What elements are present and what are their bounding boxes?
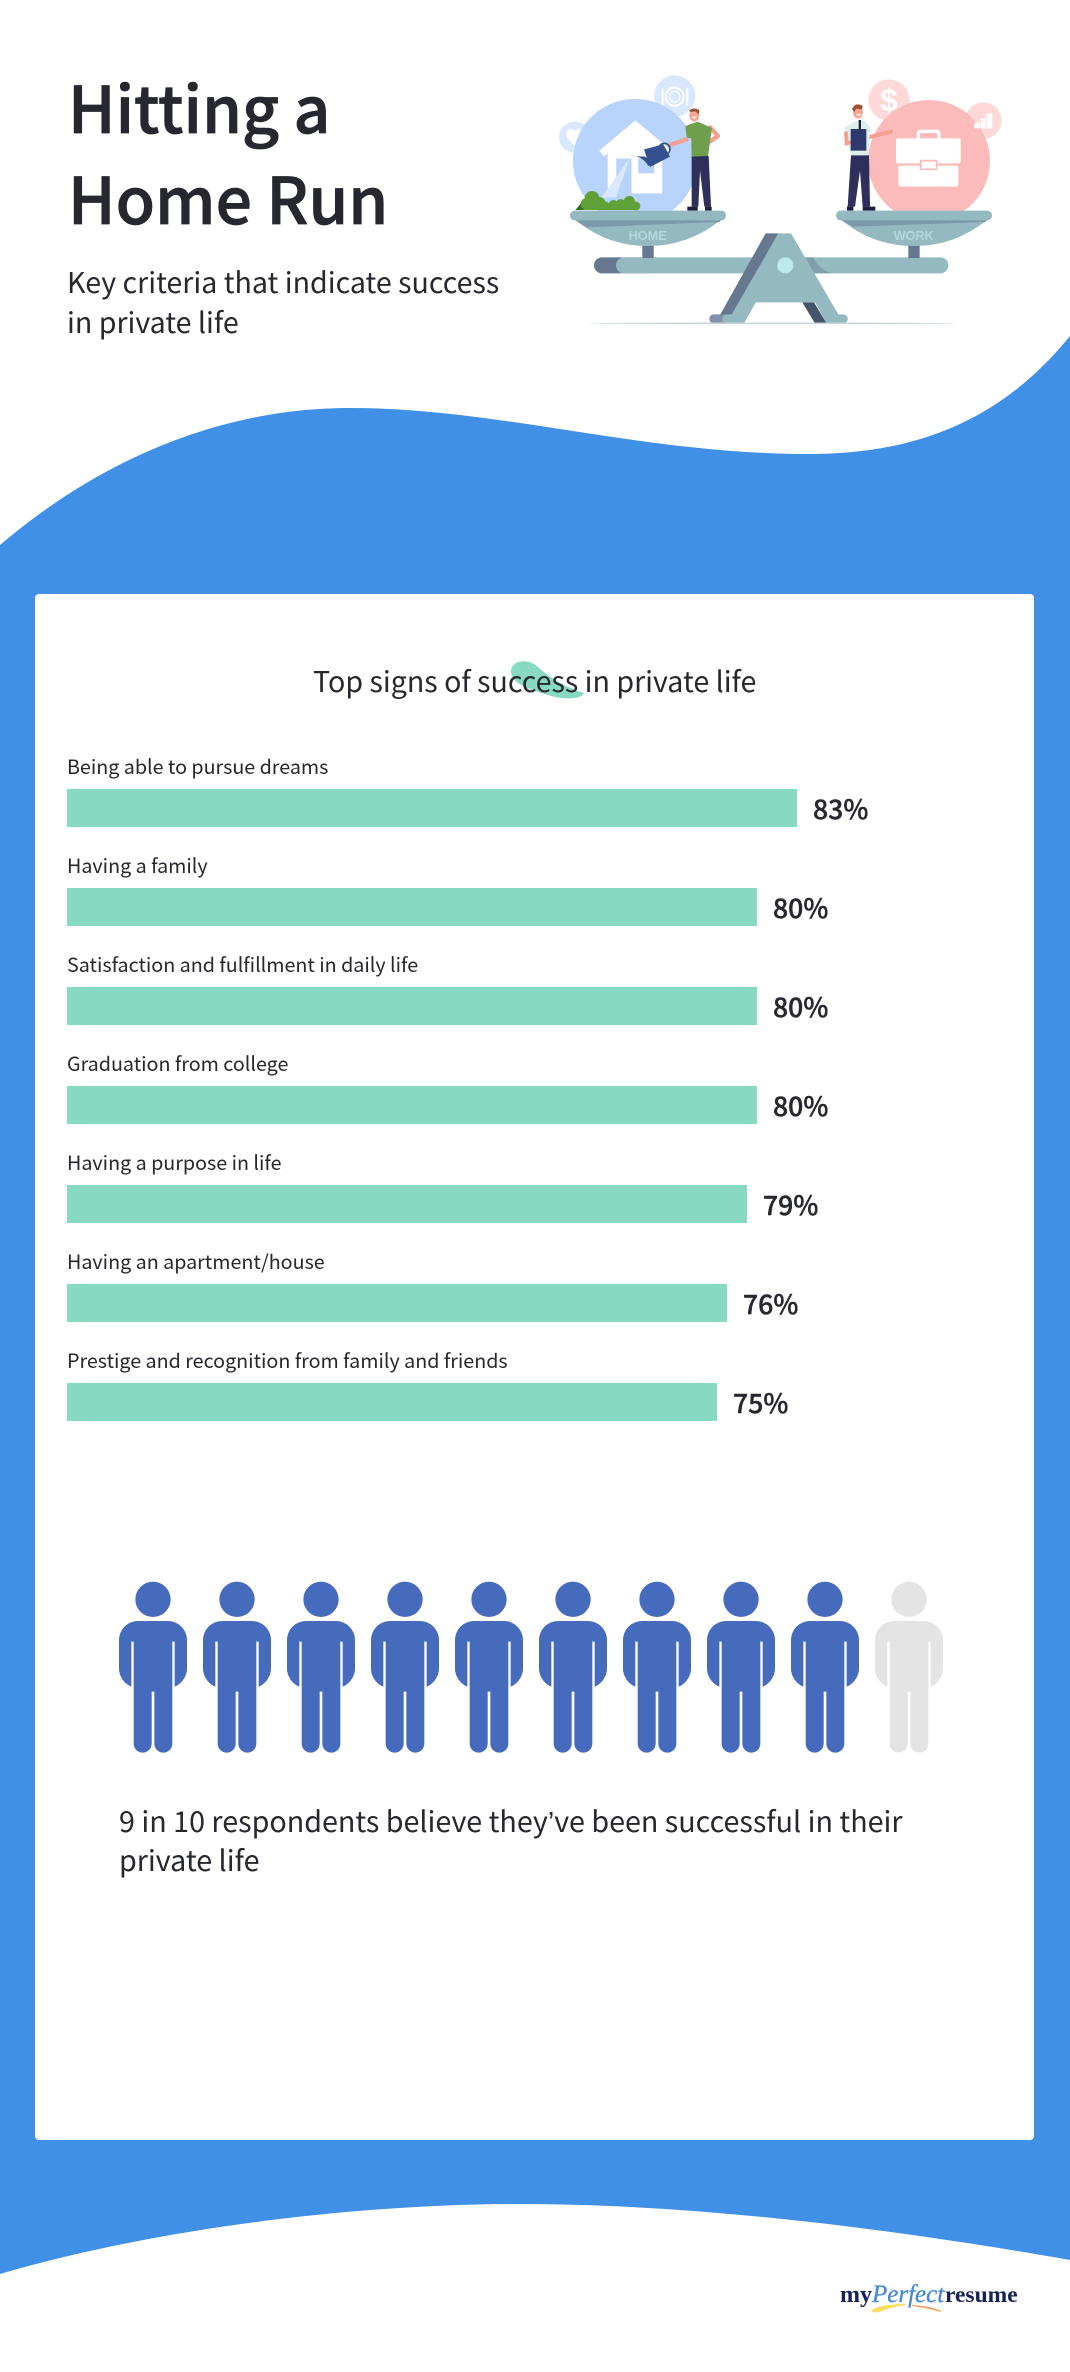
subtitle [67, 261, 499, 342]
chart title: Top signs of success in private life [313, 660, 756, 701]
icon: heart [559, 122, 590, 153]
logo: myPerfectResume: resume [945, 2282, 1018, 2308]
left pan with HOME label [570, 211, 726, 258]
ground shadow [589, 322, 954, 324]
icon: briefcase [896, 131, 961, 187]
man with watering can [630, 108, 718, 211]
title [68, 60, 388, 243]
callout text [119, 1800, 903, 1880]
left pan with HOME label: HOME [629, 229, 667, 243]
bar chart: top signs of success [67, 751, 868, 1421]
bar: graduation 80%: Graduation from college [67, 1048, 288, 1077]
title: Hitting a [68, 60, 330, 152]
panel: results card [35, 594, 1034, 2140]
bar: pursue dreams 83%: 83% [813, 788, 868, 827]
icon: plate [654, 75, 695, 117]
bar: family 80% [67, 850, 828, 926]
bar: apartment 76% [67, 1246, 798, 1322]
bar: apartment 76%: Having an apartment/house [67, 1246, 325, 1275]
bar: pursue dreams 83% [67, 751, 868, 827]
water stream [602, 157, 630, 197]
bar: prestige 75%: Prestige and recognition from family and friends [67, 1345, 508, 1374]
bar: prestige 75%: 75% [733, 1382, 788, 1421]
bar: pursue dreams 83%: Being able to pursue dreams [67, 751, 328, 780]
bar: purpose 79%: Having a purpose in life [67, 1147, 282, 1176]
pictogram: 9 in 10 people [119, 1582, 943, 1753]
icon: house [599, 120, 672, 193]
home circle [573, 99, 697, 211]
bushes [575, 191, 640, 210]
logo: myPerfectResume [840, 2281, 1018, 2312]
subtitle: Key criteria that indicate success [67, 261, 499, 302]
work circles [868, 79, 1002, 211]
fulcrum [709, 233, 848, 323]
bar: graduation 80% [67, 1048, 828, 1124]
bar: family 80%: 80% [773, 887, 828, 926]
title: Home Run [68, 151, 388, 243]
bar: purpose 79% [67, 1147, 818, 1223]
icon: dollar sign: $ [880, 83, 898, 118]
bar: purpose 79%: 79% [763, 1184, 818, 1223]
beam [594, 257, 948, 273]
bar: satisfaction 80%: 80% [773, 986, 828, 1025]
callout text: private life [119, 1839, 259, 1880]
right pan with WORK label: WORK [894, 229, 935, 243]
icon: bar chart [974, 113, 992, 128]
illustration: balance scale of home and work [559, 75, 1002, 324]
blob behind chart title [511, 661, 584, 698]
logo: myPerfectResume: my [840, 2282, 872, 2308]
subtitle: in private life [67, 301, 239, 342]
bar: family 80%: Having a family [67, 850, 208, 879]
bar: graduation 80%: 80% [773, 1085, 828, 1124]
bar: satisfaction 80%: Satisfaction and fulfillment in daily life [67, 949, 418, 978]
bar: satisfaction 80% [67, 949, 828, 1025]
logo: myPerfectResume: Perfect [871, 2281, 945, 2308]
man with clipboard [844, 104, 891, 211]
right pan with WORK label [836, 211, 992, 258]
bar: prestige 75% [67, 1345, 788, 1421]
bar: apartment 76%: 76% [743, 1283, 798, 1322]
callout text: 9 in 10 respondents believe they’ve been successful in their [119, 1800, 903, 1841]
